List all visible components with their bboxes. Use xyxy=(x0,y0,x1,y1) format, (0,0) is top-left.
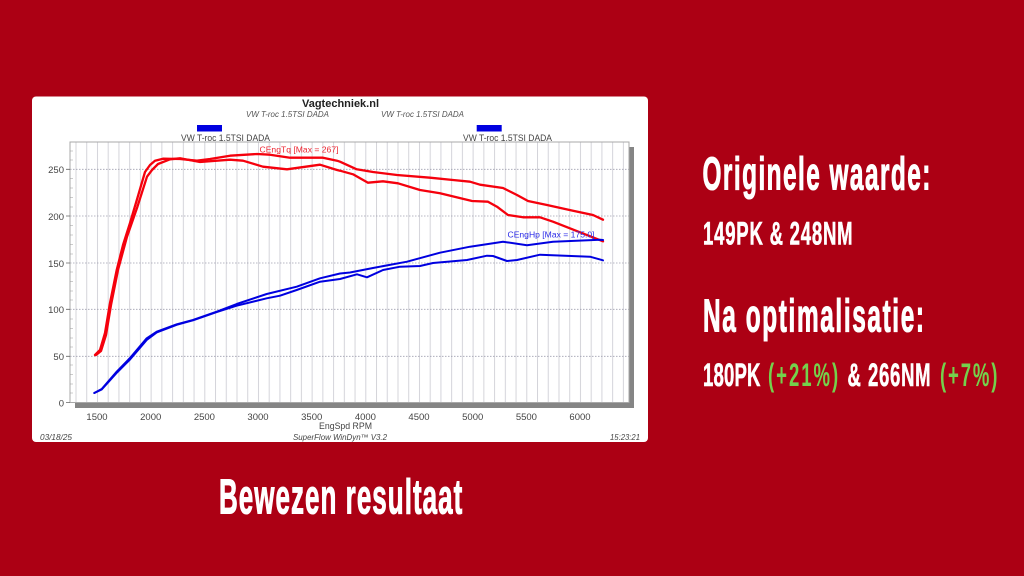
text: original numbers: 149PK & 248NM xyxy=(703,215,853,252)
text: optimised numbers: (+21%) xyxy=(768,357,838,394)
plot area xyxy=(48,142,634,431)
torque curve label: CEngTq [Max = 267] xyxy=(260,144,338,154)
y axis labels: 250 xyxy=(48,165,64,176)
y axis labels: 0 xyxy=(59,398,64,410)
text: optimised numbers: (+7%) xyxy=(940,357,997,394)
panel: dyno chart xyxy=(32,96,648,442)
text: optimised numbers: 266NM xyxy=(868,357,931,394)
footer software: SuperFlow WinDyn™ V3.2 xyxy=(293,433,388,442)
legend right xyxy=(463,125,552,143)
power curve label: CEngHp [Max = 175.0] xyxy=(508,230,594,240)
footer time: 15:23:21 xyxy=(610,433,640,442)
run labels top xyxy=(246,110,464,119)
y axis labels xyxy=(48,165,64,410)
x axis labels: 3000 xyxy=(247,412,269,423)
y axis labels: 200 xyxy=(48,212,64,223)
footer date: 03/18/25 xyxy=(40,433,73,442)
legend right: VW T-roc 1.5TSI DADA xyxy=(463,133,552,143)
x axis title: EngSpd RPM xyxy=(319,421,372,431)
heading: original value: Originele waarde: xyxy=(702,148,930,199)
y axis labels: 100 xyxy=(48,305,64,316)
torque curves xyxy=(95,154,603,355)
text: optimised numbers: & xyxy=(848,357,861,394)
x axis labels xyxy=(86,412,591,423)
heading: after optimisation: Na optimalisatie: xyxy=(703,290,924,341)
run labels top: VW T-roc 1.5TSI DADA xyxy=(246,110,329,119)
run labels top: VW T-roc 1.5TSI DADA xyxy=(381,110,464,119)
x axis labels: 2500 xyxy=(194,412,215,423)
x axis labels: 2000 xyxy=(140,412,161,423)
text: optimised numbers: 180PK xyxy=(703,357,760,394)
y axis labels: 150 xyxy=(48,259,64,270)
text: optimised numbers xyxy=(703,357,997,394)
y axis labels: 50 xyxy=(53,352,64,363)
x axis labels: 5000 xyxy=(462,412,483,423)
legend left xyxy=(181,125,270,143)
power curves xyxy=(94,240,603,393)
x axis labels: 4000 xyxy=(355,412,376,423)
x axis labels: 6000 xyxy=(569,412,591,423)
x axis labels: 1500 xyxy=(86,412,108,423)
legend left: VW T-roc 1.5TSI DADA xyxy=(181,133,270,143)
x axis labels: 4500 xyxy=(408,412,430,423)
caption: Bewezen resultaat xyxy=(219,471,462,525)
chart title: Vagtechniek.nl xyxy=(302,98,379,110)
x axis labels: 3500 xyxy=(301,412,322,423)
x axis labels: 5500 xyxy=(516,412,537,423)
chart card xyxy=(32,96,648,442)
